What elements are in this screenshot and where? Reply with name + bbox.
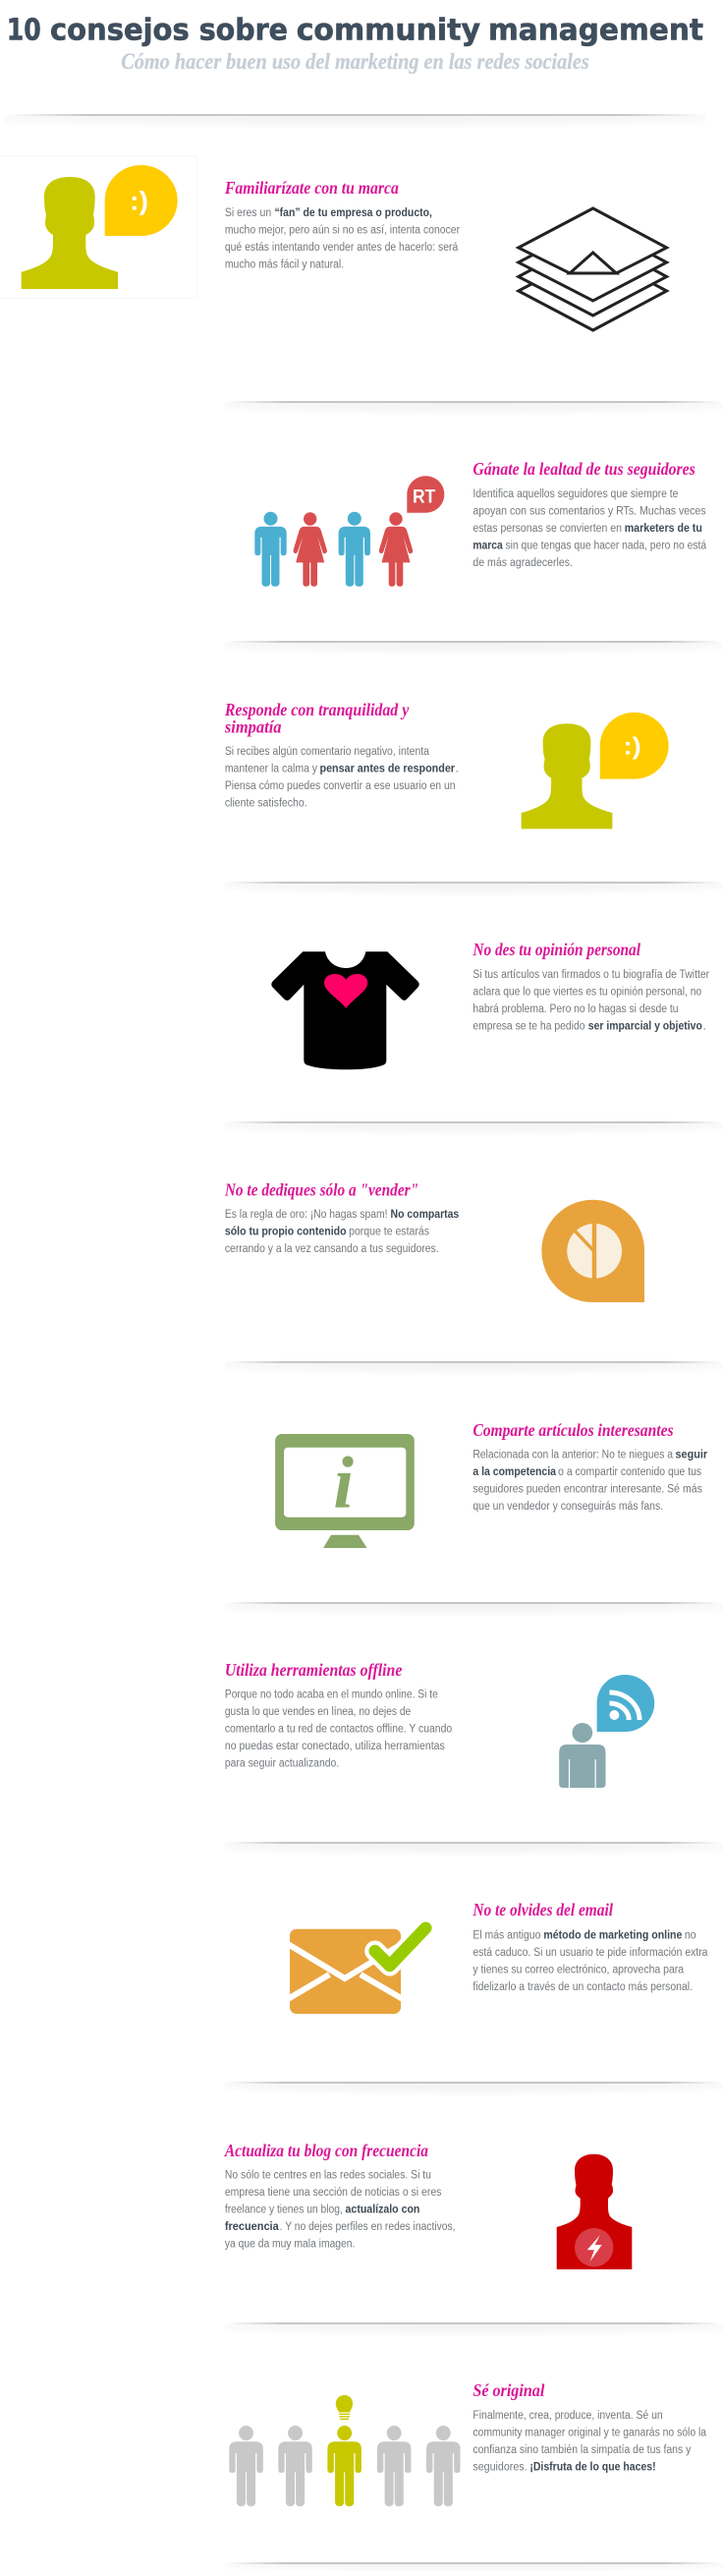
panel: 4 no des tu opinión personal [271,940,709,1069]
text block: gusta lo que vendes en línea, no dejes de [225,1704,412,1718]
text block: Relacionada con la anterior: No te niegues a [473,1448,673,1461]
text block [225,744,459,810]
panel: 6 comparte artículos interesantes [275,1420,707,1548]
icon: person with smiley speech bubble in white card [0,156,196,298]
text block: Es la regla de oro: ¡No hagas spam! [225,1207,388,1221]
icon: person with smiley speech bubble: :) [624,733,641,761]
text block: mucho mejor, pero aún si no es así, intenta conocer [225,222,460,237]
text block: fidelizarlo a través de un contacto más personal. [473,1979,693,1993]
text block: seguidores. [473,2459,528,2474]
heading: Comparte artículos interesantes [473,1420,674,1440]
icon: person with RSS bubble [559,1675,654,1788]
text block: estas personas se convierten en [473,521,622,535]
text block: y tienes su correo electrónico, aprovecha para [473,1962,684,1976]
text block [473,1448,707,1513]
text block: empresa tiene una sección de noticias o si eres [225,2185,441,2199]
text block [225,1207,460,1255]
icon: person with smiley speech bubble in white card: :) [130,187,148,216]
title: sobre [199,14,288,48]
text block: ser imparcial y objetivo [588,1018,702,1033]
icon: monitor with info symbol: i [333,1444,354,1524]
icon: followers with RT bubble: RT [413,487,436,508]
text block: Si recibes algún comentario negativo, intenta [225,744,429,758]
text block: confianza sino también la simpatía de tus fans y [473,2442,691,2456]
text block [225,2167,456,2251]
text block: mantener la calma y [225,761,317,775]
text block: de más agradecerles. [473,555,573,569]
panel: 9 actualiza tu blog con frecuencia [224,2141,632,2269]
text block: “fan” de tu empresa o producto, [274,205,432,219]
panel: 1 familiarízate con tu marca [0,156,667,330]
text block: mucho más fácil y natural. [225,257,344,271]
text block: . [456,761,459,775]
text block: cerrando y a la vez cansando a tus seguidores. [225,1241,439,1255]
panel: 3 responde con tranquilidad y simpatía [224,700,669,829]
heading: Utiliza herramientas offline [225,1660,402,1680]
text block: ¡Disfruta de lo que haces! [529,2459,656,2474]
icon: red person with lightning badge [557,2154,632,2269]
text block [225,1688,452,1770]
text block [473,1927,708,1993]
text block: Si eres un [225,205,271,219]
panel: 8 no te olvides del email [288,1900,708,2014]
text block: o a compartir contenido que tus [558,1464,701,1478]
icon: stacked layers [519,208,667,330]
text block [225,205,460,271]
heading: simpatía [224,717,282,737]
text block: No sólo te centres en las redes sociales. Si tu [225,2167,431,2181]
icon: pie chart speech bubble [541,1200,644,1302]
text block: freelance y tienes un blog, [225,2203,343,2216]
title: consejos [50,14,190,48]
text block: seguidores pueden encontrar interesante. Sé más [473,1482,702,1496]
heading: Gánate la lealtad de tus seguidores [473,459,695,479]
icon: t-shirt with heart [271,951,419,1069]
heading [224,700,409,737]
icon: person with smiley speech bubble [522,713,669,829]
text block: marketers de tu [625,521,702,535]
icon: followers with RT bubble [254,476,444,587]
panel: 7 utiliza herramientas offline [225,1660,654,1788]
text block [473,487,706,569]
text block: método de marketing online [543,1927,683,1941]
text block: Piensa cómo puedes convertir a ese usuario en un [225,778,456,792]
heading: Sé original [473,2380,544,2400]
text block [473,967,709,1033]
text block: a la competencia [473,1464,556,1478]
subtitle: Cómo hacer buen uso del marketing en las redes sociales [121,49,589,74]
text block: para seguir actualizando. [225,1756,339,1770]
text block: actualízalo con [346,2203,419,2216]
text block [473,2408,706,2474]
text block: sólo tu propio contenido [225,1224,347,1238]
text block: no puedas estar conectado, utiliza herramientas [225,1739,445,1752]
text block: Finalmente, crea, produce, inventa. Sé un [473,2408,663,2422]
panel: 5 no te dediques sólo a vender [224,1180,644,1302]
title: 10 [7,14,41,48]
text block: Porque no todo acaba en el mundo online. Si te [225,1688,438,1701]
text block: marca [473,538,503,552]
text block: porque te estarás [349,1224,429,1238]
icon: envelope with check mark [288,1928,425,2014]
text block: seguir [676,1448,707,1461]
text block: El más antiguo [473,1927,541,1941]
text block: No compartas [391,1207,460,1221]
text block: comentarlo a tu red de contactos offline. Y cuando [225,1722,452,1736]
title [7,14,703,48]
title: community [297,14,480,48]
text block: . Y no dejes perfiles en redes inactivos, [280,2219,456,2233]
icon: monitor with info symbol [275,1434,415,1548]
text block: Identifica aquellos seguidores que siempre te [473,487,679,500]
text block: . [703,1018,706,1033]
title: management [488,14,703,48]
text block: empresa se te ha pedido [473,1018,585,1033]
panel: 10 sé original [229,2380,706,2506]
text block: no [685,1927,696,1941]
text block: que un vendedor y conseguirás más fans. [473,1499,663,1513]
icon: row of people with lightbulb [229,2395,461,2506]
text block: frecuencia [225,2219,279,2233]
text block: ya que da muy mala imagen. [225,2237,355,2251]
text block: habrá problema. Pero no lo hagas si desde tu [473,1002,678,1015]
heading: Actualiza tu blog con frecuencia [224,2141,428,2160]
heading: Responde con tranquilidad y [224,700,409,719]
panel: 2 gánate la lealtad de tus seguidores [254,459,706,587]
text block: qué estás intentando vender antes de hacerlo: será [225,240,459,254]
heading: No des tu opinión personal [473,940,640,959]
heading: No te dediques sólo a "vender" [224,1180,418,1200]
heading: Familiarízate con tu marca [224,178,399,198]
heading: No te olvides del email [473,1900,613,1919]
text block: cliente satisfecho. [225,795,307,810]
text block: pensar antes de responder [320,761,455,775]
